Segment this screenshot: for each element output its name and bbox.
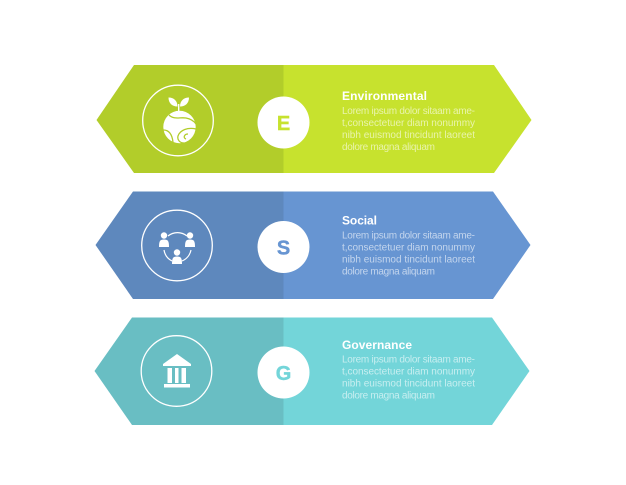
panel: Environmental xyxy=(96,65,532,173)
letter badge: E xyxy=(258,96,310,148)
icon ring: Environmental xyxy=(143,85,213,156)
body text: Governance xyxy=(342,354,475,402)
body text: Environmental: nibh euismod tincidunt laoreet xyxy=(342,130,475,141)
heading: Social: Social xyxy=(342,214,377,228)
panel background right: Governance xyxy=(284,318,530,425)
body text: Governance: nibh euismod tincidunt laoreet xyxy=(342,378,475,390)
letter badge: E: E xyxy=(277,113,290,135)
body text: Governance: t,consectetuer diam nonummy xyxy=(342,366,475,378)
body text: Social: t,consectetuer diam nonummy xyxy=(342,242,475,254)
panel background left: Governance xyxy=(94,318,284,425)
icon: government building xyxy=(163,354,191,388)
body text: Environmental: dolore magna aliquam xyxy=(342,142,435,153)
icon: globe with sprout xyxy=(163,98,196,143)
panel background left: Environmental xyxy=(96,65,284,173)
letter badge: G xyxy=(258,346,310,398)
heading: Environmental: Environmental xyxy=(342,89,427,103)
body text: Governance: dolore magna aliquam xyxy=(342,390,435,402)
body text: Social: nibh euismod tincidunt laoreet xyxy=(342,254,475,266)
heading: Governance: Governance xyxy=(342,338,412,352)
body text: Environmental xyxy=(342,106,475,153)
body text: Social: dolore magna aliquam xyxy=(342,266,435,278)
panel background right: Environmental xyxy=(284,65,532,173)
icon ring: Governance xyxy=(141,336,212,406)
body text: Social: Lorem ipsum dolor sitaam ame- xyxy=(342,230,475,242)
panel background right: Social xyxy=(284,192,530,299)
panel: Governance xyxy=(94,318,530,425)
icon ring: Social xyxy=(142,210,212,281)
body text: Environmental: t,consectetuer diam nonummy xyxy=(342,118,475,129)
letter badge: G: G xyxy=(276,363,291,385)
panel background left: Social xyxy=(96,192,284,299)
letter badge: S: S xyxy=(277,238,290,260)
body text: Governance: Lorem ipsum dolor sitaam ame- xyxy=(342,354,475,366)
panel: Social xyxy=(96,192,530,299)
body text: Social xyxy=(342,230,475,278)
icon: connected people xyxy=(159,232,195,264)
body text: Environmental: Lorem ipsum dolor sitaam ame- xyxy=(342,106,475,117)
letter badge: S xyxy=(258,221,310,273)
